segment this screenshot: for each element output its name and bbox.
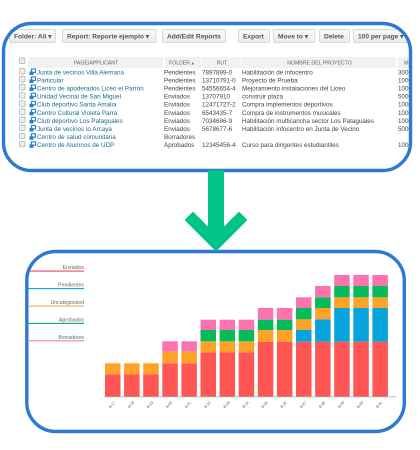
toolbar buttons: Folder: All ▾ — [14, 33, 52, 40]
table header: NOMBRE DEL PROYECTO — [287, 60, 352, 66]
table rows: Proyecto de Prueba — [242, 77, 298, 84]
table header: PAGE/APPLICANT — [74, 60, 119, 66]
table header: MO — [404, 60, 412, 66]
table rows: 12345456-4 — [202, 142, 236, 149]
table rows: Compra implementos deportivos — [242, 102, 333, 109]
date axis labels: 8-17 — [108, 401, 116, 409]
toolbar buttons: Report: Reporte ejemplo ▾ — [67, 33, 150, 40]
date axis labels: 8-23 — [223, 401, 231, 409]
table rows: 1000 — [398, 118, 413, 125]
date axis labels: 8-25 — [261, 401, 269, 409]
table rows: 54556654-4 — [202, 86, 236, 92]
date axis labels: 8-26 — [280, 401, 288, 409]
table rows: Centro de salud comunitaria — [37, 134, 116, 141]
table rows: 7034686-9 — [202, 118, 233, 125]
table rows: Pendientes — [164, 77, 196, 84]
table rows: Habilitación de infocentro — [242, 69, 313, 76]
table rows: 1000 — [398, 77, 413, 84]
table rows: 5678677-6 — [202, 126, 233, 133]
table rows: 1000 — [398, 142, 413, 149]
table rows: Enviados — [164, 94, 190, 101]
date axis labels: 8-24 — [242, 401, 250, 409]
table rows: 6543435-7 — [202, 110, 233, 117]
legend: Aprobados — [59, 318, 84, 324]
table rows — [20, 68, 413, 149]
date axis labels: 8-30 — [356, 401, 364, 409]
legend: Borradores — [58, 335, 84, 341]
table rows: Habilitación infocentro en Junta de Vecino — [242, 126, 360, 133]
table rows: 7897899-0 — [202, 69, 233, 76]
table rows: Mejoramiento instalaciones del Liceo — [242, 86, 346, 92]
table rows: 12471727-2 — [202, 102, 236, 109]
table rows: 1000 — [398, 86, 413, 92]
table rows: Aprobados — [164, 142, 194, 149]
table rows: Centro de Alumnos de UDP — [37, 142, 114, 149]
table rows: Enviados — [164, 110, 190, 117]
table header — [20, 57, 412, 68]
table rows: construir plaza — [242, 94, 283, 101]
table rows: Habilitación multicancha sector Los Pataguales — [242, 118, 374, 125]
table rows: Enviados — [164, 102, 190, 109]
table rows: Unidad Vecinal de San Miguel — [37, 94, 121, 101]
table rows: Centro Cultural Violeta Parra — [37, 110, 118, 117]
date axis labels: 8-19 — [146, 401, 154, 409]
table rows: 13710791-0 — [202, 77, 236, 84]
date axis labels: 8-31 — [375, 401, 383, 409]
table rows: Pendientes — [164, 86, 196, 92]
panel: applicant table — [4, 24, 413, 170]
arrow: down — [186, 171, 246, 250]
date axis labels: 8-27 — [299, 401, 307, 409]
toolbar buttons: Add/Edit Reports — [167, 33, 221, 40]
date axis labels: 8-18 — [127, 401, 135, 409]
table rows: Enviados — [164, 126, 190, 133]
table rows: 13707910 — [202, 94, 231, 101]
date axis labels: 8-28 — [318, 401, 326, 409]
date axis labels: 8-20 — [165, 401, 173, 409]
table rows: Curso para dirigentes estudiantiles — [242, 142, 339, 149]
table rows: Junta de vecinos Villa Alemana — [37, 69, 125, 76]
toolbar buttons: Export — [243, 33, 265, 40]
toolbar buttons — [10, 30, 410, 42]
toolbar buttons: 100 per page ▾ — [358, 33, 404, 40]
table rows: Club deportivo Santa Amalia — [37, 102, 117, 109]
legend: Enviados — [63, 265, 84, 271]
legend — [28, 265, 84, 341]
toolbar buttons: Move to ▾ — [278, 33, 309, 40]
panel: chart — [27, 252, 404, 432]
table rows: Junta de vecinos lo Arcaya — [37, 126, 112, 133]
table rows: Particular — [37, 77, 64, 84]
date axis labels: 8-21 — [184, 401, 192, 409]
table rows: Centro de apoderados Liceo el Parrón — [37, 86, 144, 92]
date axis labels: 8-29 — [337, 401, 345, 409]
table rows: 1000 — [398, 102, 413, 109]
table rows: Club deportivo Los Pataguales — [37, 118, 123, 125]
table header: RUT — [217, 60, 228, 66]
table rows: Borradores — [164, 134, 195, 141]
table rows: 5000 — [398, 126, 413, 133]
stacked bar chart — [104, 275, 396, 397]
table rows: 3000 — [398, 69, 413, 76]
legend: Uncategorized — [51, 300, 84, 306]
date axis labels — [108, 401, 383, 409]
table rows: Enviados — [164, 118, 190, 125]
legend: Pendientes — [58, 282, 84, 288]
table rows: Pendientes — [164, 69, 196, 76]
table header: FOLDER ▴ — [169, 60, 194, 66]
date axis labels: 8-22 — [204, 401, 212, 409]
table rows: 5000 — [398, 94, 413, 101]
table rows: 1000 — [398, 110, 413, 117]
toolbar buttons: Delete — [324, 33, 344, 40]
table rows: Compra de instrumentos musicales — [242, 110, 341, 117]
